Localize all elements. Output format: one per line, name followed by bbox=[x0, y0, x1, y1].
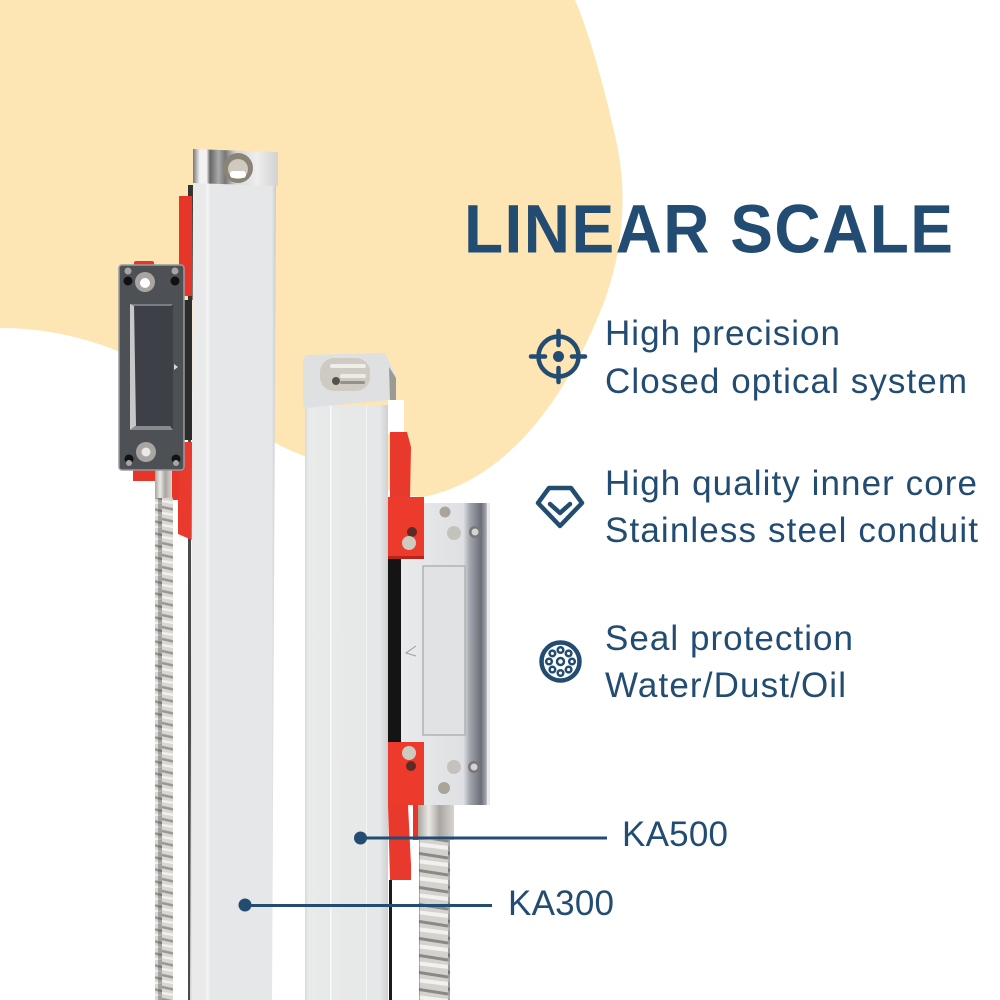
text: seal protection: Seal protection bbox=[605, 619, 853, 658]
text: high precision bbox=[605, 314, 967, 401]
end cap KA500 bbox=[303, 353, 396, 408]
red clip upper bbox=[388, 432, 424, 559]
scale body KA300 bbox=[190, 183, 276, 1000]
product: KA500 scale bbox=[303, 353, 490, 1000]
icon: crosshair target bbox=[531, 331, 585, 382]
icon: diamond bbox=[538, 488, 582, 526]
cable KA300 bbox=[155, 470, 173, 1000]
red clip lower bbox=[178, 442, 192, 540]
icon: cable cross-section bbox=[542, 642, 580, 680]
text: seal protection bbox=[605, 619, 853, 705]
callout: KA500: KA500 bbox=[622, 815, 728, 854]
white side strip bbox=[388, 400, 404, 434]
cable KA500 bbox=[413, 798, 454, 1000]
end cap KA300 bbox=[193, 149, 278, 186]
text: inner core bbox=[605, 464, 978, 550]
callout: KA300: KA300 bbox=[508, 884, 614, 923]
text: high precision: High precision bbox=[605, 314, 840, 353]
text: inner core: High quality inner core bbox=[605, 464, 977, 503]
feature: high precision bbox=[531, 314, 967, 401]
red clip lower bbox=[387, 742, 424, 880]
text: inner core: Stainless steel conduit bbox=[605, 511, 978, 550]
dark channel bbox=[188, 185, 193, 300]
red clip upper bbox=[179, 196, 192, 296]
reader head dark bbox=[119, 265, 184, 470]
feature: seal protection bbox=[542, 619, 853, 705]
scale body KA500 bbox=[305, 405, 388, 1000]
black channel bbox=[388, 556, 401, 746]
title: LINEAR SCALE bbox=[464, 191, 953, 268]
background blob bbox=[0, 0, 623, 497]
product: KA300 scale bbox=[119, 149, 278, 1000]
text: seal protection: Water/Dust/Oil bbox=[605, 666, 846, 705]
callout: KA300 bbox=[238, 884, 614, 923]
reader head chrome bbox=[401, 503, 490, 805]
callout: KA500 bbox=[354, 815, 728, 854]
feature: inner core bbox=[538, 464, 978, 550]
text: high precision: Closed optical system bbox=[605, 362, 967, 401]
